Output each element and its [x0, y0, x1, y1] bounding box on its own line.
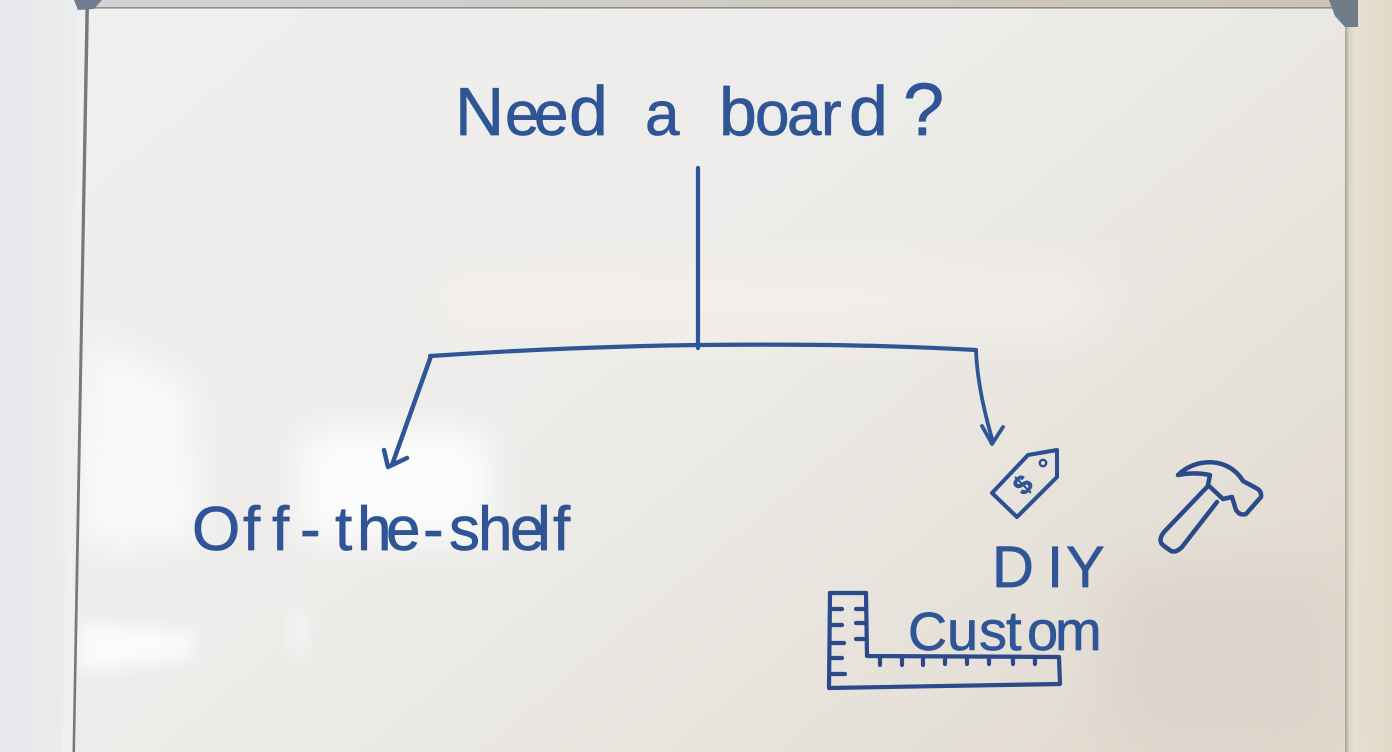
reflection highlights	[78, 270, 1340, 750]
corner bracket: top left	[74, 0, 102, 10]
arrow: to off-the-shelf	[384, 356, 431, 467]
horizontal branch line	[430, 345, 976, 356]
icon: carpenter square ruler	[829, 593, 1060, 688]
dollar sign: $	[1007, 469, 1039, 501]
label: Custom: Custom	[908, 599, 1102, 662]
label: DIY: DIY	[992, 535, 1105, 600]
label: off-the-shelf: Off-the-shelf	[192, 495, 571, 564]
title: Need a board?	[455, 68, 944, 151]
arrow: to DIY	[976, 350, 1003, 444]
corner bracket: top right	[1329, 0, 1358, 27]
icon: hammer	[1160, 462, 1261, 552]
icon: price tag	[992, 450, 1057, 517]
vertical connector line	[696, 168, 700, 348]
